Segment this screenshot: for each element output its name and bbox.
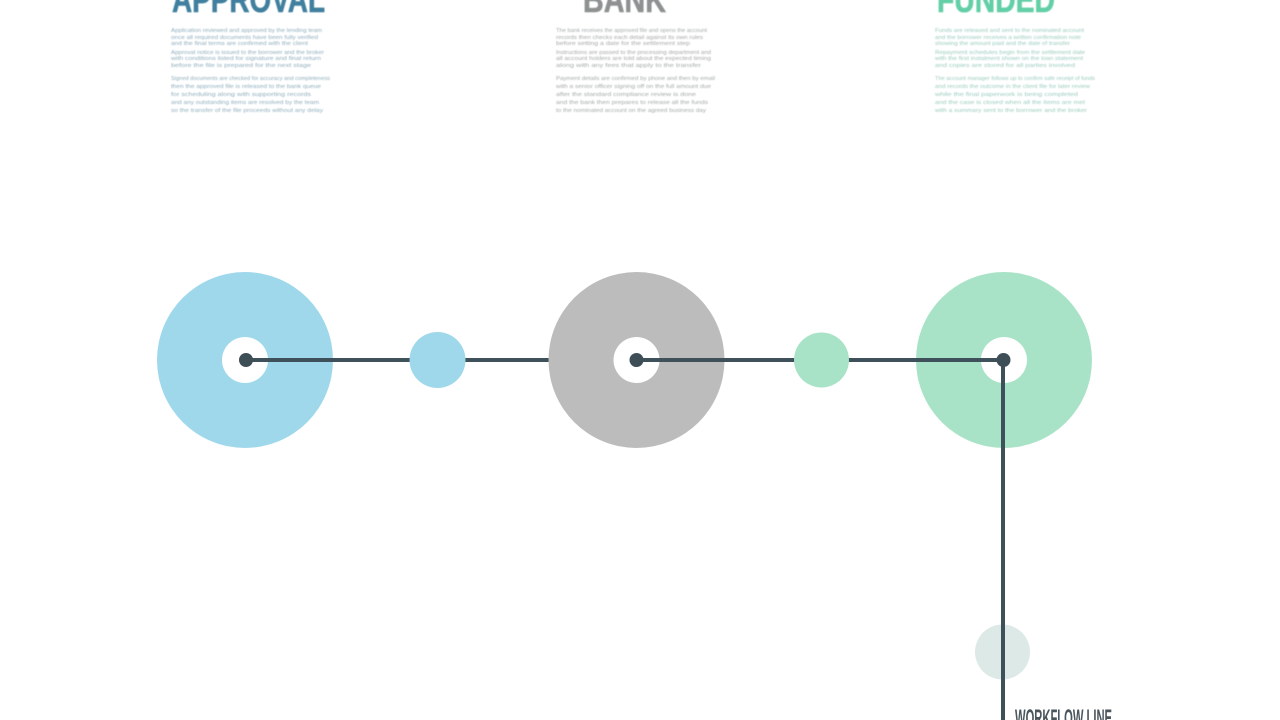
text block: bank description: Payment details are confirmed by phone and then by email (556, 76, 715, 82)
text block: funded description: Funds are released and sent to the nominated account (935, 28, 1085, 34)
text block: funded description: with the first instalment shown on the loan statement (935, 56, 1084, 62)
text block: bank description: The bank receives the approved file and opens the account (556, 28, 708, 34)
text block: bank description: before setting a date for the settlement step (556, 41, 690, 47)
text block: bank description: and the bank then prepares to release all the funds (556, 100, 709, 106)
text block: funded description: showing the amount paid and the date of transfer (935, 41, 1070, 47)
text block: approval description: Application reviewed and approved by the lending team (171, 28, 322, 34)
node: small green (794, 332, 849, 388)
node: pale circle (975, 624, 1030, 680)
text block: funded description: The account manager follows up to confirm safe receipt of funds (935, 76, 1096, 82)
text block: bank description: with a senior officer signing off on the full amount due (556, 84, 711, 90)
text block: approval description: once all required documents have been fully verified (171, 35, 318, 41)
connector: funded downward (1001, 360, 1005, 720)
text block: bank description: records then checks each detail against its own rules (556, 35, 704, 41)
text block: bank description: along with any fees that apply to the transfer (556, 63, 701, 69)
connector: approval to bank (246, 358, 560, 362)
text block: approval description: with conditions listed for signature and final return (171, 56, 321, 62)
joint dot: approval (239, 353, 253, 367)
node: small blue (410, 332, 466, 388)
text block: approval description (171, 28, 331, 114)
text block: approval description: so the transfer of the file proceeds without any delay (171, 108, 324, 114)
text block: funded description: and the case is closed when all the items are met (935, 100, 1086, 106)
text block: funded description: Repayment schedules begin from the settlement date (935, 50, 1085, 56)
joint dot: funded (996, 353, 1010, 367)
text block: approval description: Signed documents are checked for accuracy and completeness (171, 76, 331, 82)
text block: approval description: for scheduling along with supporting records (171, 92, 312, 98)
text block: approval description: and the final terms are confirmed with the client (171, 41, 309, 47)
text block: approval description: then the approved file is released to the bank queue (171, 84, 321, 90)
text block: approval description: and any outstanding items are resolved by the team (171, 100, 319, 106)
text block: approval description: Approval notice is issued to the borrower and the broker (171, 50, 324, 56)
step circle: approval (157, 272, 333, 448)
connector segment: approval ring to bank (246, 358, 420, 362)
text block: bank description: Instructions are passed to the processing department and (556, 50, 711, 56)
text block: bank description (556, 28, 715, 114)
connector: bank to funded (636, 358, 1004, 362)
text block: bank description: after the standard compliance review is done (556, 92, 696, 98)
text block: bank description: to the nominated account on the agreed business day (556, 108, 707, 114)
text block: funded description (935, 28, 1096, 114)
step circle: funded (916, 272, 1092, 448)
joint dot: bank (630, 353, 644, 367)
text block: funded description: and records the outcome in the client file for later review (935, 84, 1090, 90)
text block: funded description: and copies are stored for all parties involved (935, 63, 1075, 69)
text block: approval description: before the file is prepared for the next stage (171, 63, 311, 69)
text block: bank description: all account holders are told about the expected timing (556, 56, 711, 62)
text block: funded description: and the borrower receives a written confirmation note (935, 35, 1081, 41)
text block: funded description: with a summary sent to the borrower and the broker (935, 108, 1087, 114)
step circle: bank (548, 272, 724, 448)
text block: funded description: while the final paperwork is being completed (935, 92, 1078, 98)
